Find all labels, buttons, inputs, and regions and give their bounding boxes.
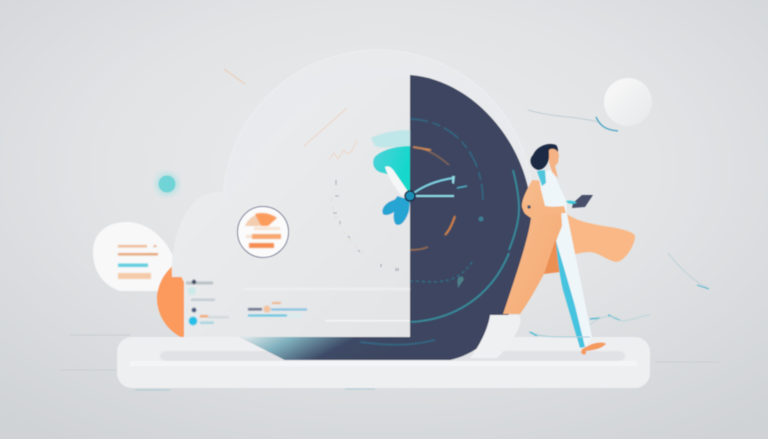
panel highlight — [325, 320, 410, 322]
tablet — [572, 195, 593, 208]
hand on tablet — [566, 201, 577, 204]
white dress — [538, 170, 592, 349]
coat inner shadow — [544, 238, 560, 274]
teal light wedge — [371, 130, 410, 147]
accent dashes near feet — [135, 285, 709, 390]
accent strokes right — [668, 253, 708, 288]
round badge — [238, 206, 288, 258]
face — [549, 149, 559, 178]
foot — [581, 342, 606, 355]
floating sphere — [528, 78, 652, 131]
platform — [117, 337, 650, 388]
dark half circle dial — [240, 75, 532, 360]
coat body and leg — [503, 180, 566, 314]
woman figure — [503, 144, 635, 355]
blue petals — [382, 196, 410, 225]
glass panel — [172, 75, 410, 337]
bubble text lines — [118, 244, 158, 279]
right hands — [411, 178, 453, 195]
floor lines — [60, 335, 720, 370]
forearm — [523, 203, 566, 216]
accent strokes upper left — [224, 69, 245, 84]
flowing coat tail — [556, 212, 635, 262]
teal main wedge — [373, 146, 410, 193]
orange half disc — [157, 264, 185, 339]
clock hands and petals — [371, 130, 467, 225]
badge chart — [245, 213, 281, 248]
large glass circle — [223, 50, 533, 360]
floating teal dot — [155, 172, 179, 196]
panel data rows — [186, 280, 410, 325]
dial marks — [478, 216, 484, 222]
left white bubble — [93, 222, 190, 291]
blue trouser — [556, 241, 585, 348]
elbow mark — [527, 205, 531, 209]
teal shoulder — [537, 170, 546, 186]
pedestal cube — [470, 315, 520, 358]
hair — [531, 144, 558, 170]
scene — [60, 50, 720, 390]
panel clock scale — [304, 108, 398, 271]
white hand — [385, 166, 409, 196]
dial arcs — [360, 119, 519, 345]
hub — [405, 191, 415, 201]
